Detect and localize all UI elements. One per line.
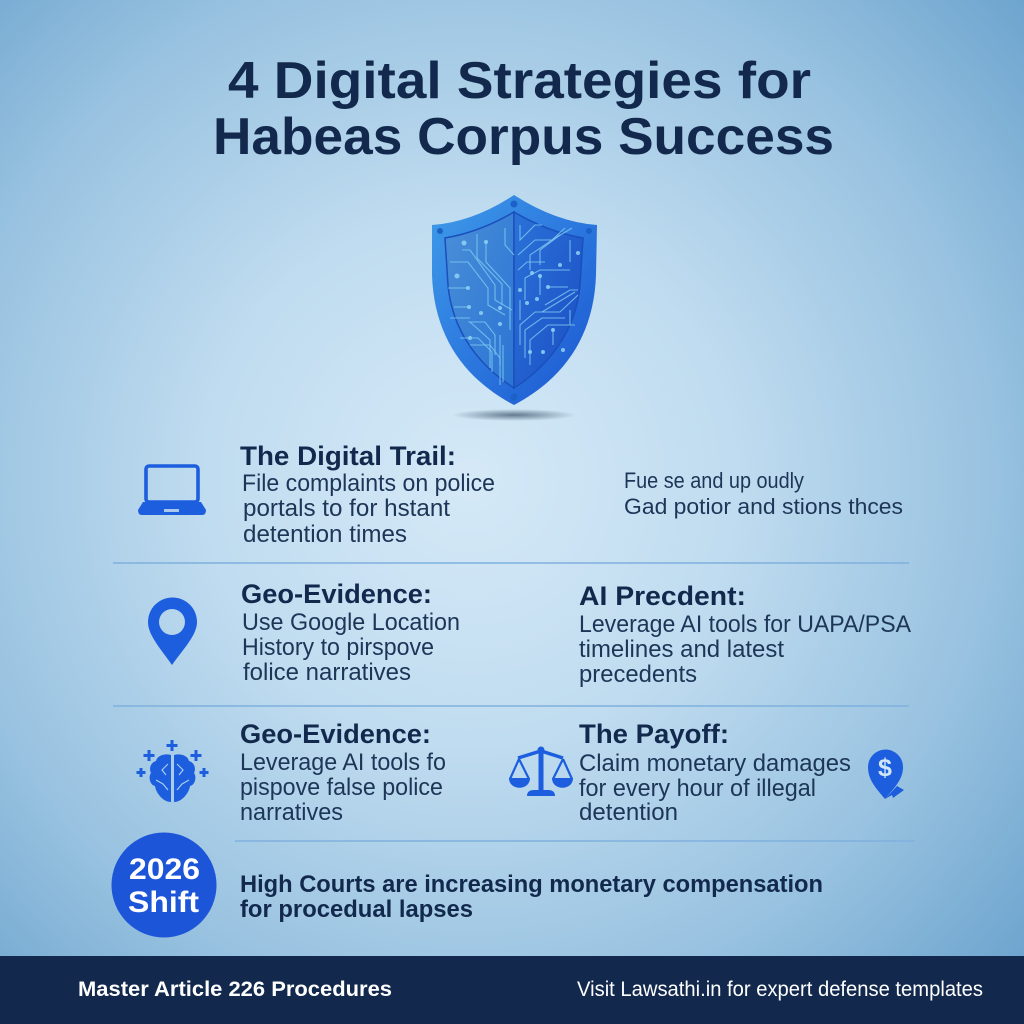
panel: ai precedent: timelines and latest	[579, 636, 784, 663]
icon: dollar pin badge	[868, 750, 904, 799]
icon: laptop	[138, 466, 206, 515]
text block: upper right	[624, 468, 903, 519]
panel: the digital trail: portals to for hstant	[243, 495, 450, 522]
panel: geo-evidence location: Geo-Evidence:	[241, 579, 432, 609]
callout: high courts: for procedual lapses	[240, 896, 473, 923]
panel: the digital trail: The Digital Trail:	[240, 441, 456, 471]
panel: the digital trail: File complaints on police	[242, 470, 495, 497]
icon: scales of justice	[509, 746, 573, 796]
callout: high courts	[240, 871, 823, 923]
panel: geo-evidence location: History to pirspove	[242, 634, 434, 661]
panel: the payoff: detention	[579, 799, 678, 826]
panel: the payoff: for every hour of illegal	[579, 775, 816, 802]
panel: geo-evidence ai: Geo-Evidence:	[240, 719, 431, 749]
title	[213, 52, 834, 166]
text block: upper right: Gad potior and stions thces	[624, 494, 903, 519]
title: 4 Digital Strategies for	[228, 52, 811, 110]
footer bar: Visit Lawsathi.in for expert defense templates	[577, 978, 983, 1001]
badge: 2026 shift: Shift	[128, 886, 199, 919]
panel: ai precedent: Leverage AI tools for UAPA/PSA	[579, 611, 912, 638]
callout: high courts: High Courts are increasing monetary compensation	[240, 871, 823, 898]
panel: the digital trail	[138, 441, 495, 548]
panel: geo-evidence ai: pispove false police	[240, 774, 443, 801]
panel: the payoff	[509, 719, 904, 826]
panel: geo-evidence ai: Leverage AI tools fo	[240, 749, 446, 776]
panel: the digital trail: detention times	[243, 521, 407, 548]
text block: upper right: Fue se and up oudly	[624, 468, 805, 493]
badge: 2026 shift	[112, 832, 216, 938]
panel: ai precedent: AI Precdent:	[579, 581, 746, 611]
panel: geo-evidence location	[148, 579, 460, 686]
panel: geo-evidence ai	[136, 719, 446, 826]
icon: map pin	[148, 598, 197, 665]
panel: the payoff: The Payoff:	[579, 719, 729, 749]
panel: the payoff: Claim monetary damages	[579, 750, 851, 777]
icon: brain with sparkles	[136, 740, 208, 802]
panel: ai precedent	[579, 581, 912, 688]
panel: ai precedent: precedents	[579, 661, 697, 688]
panel: geo-evidence location: Use Google Location	[242, 609, 460, 636]
title: Habeas Corpus Success	[213, 108, 834, 166]
icon: circuit shield	[432, 195, 597, 421]
footer bar	[0, 956, 1024, 1024]
badge: 2026 shift: 2026	[129, 853, 200, 886]
icon: dollar pin badge: $	[878, 754, 892, 782]
panel: geo-evidence ai: narratives	[240, 799, 343, 826]
footer bar: Master Article 226 Procedures	[78, 978, 392, 1001]
panel: geo-evidence location: folice narratives	[243, 659, 411, 686]
